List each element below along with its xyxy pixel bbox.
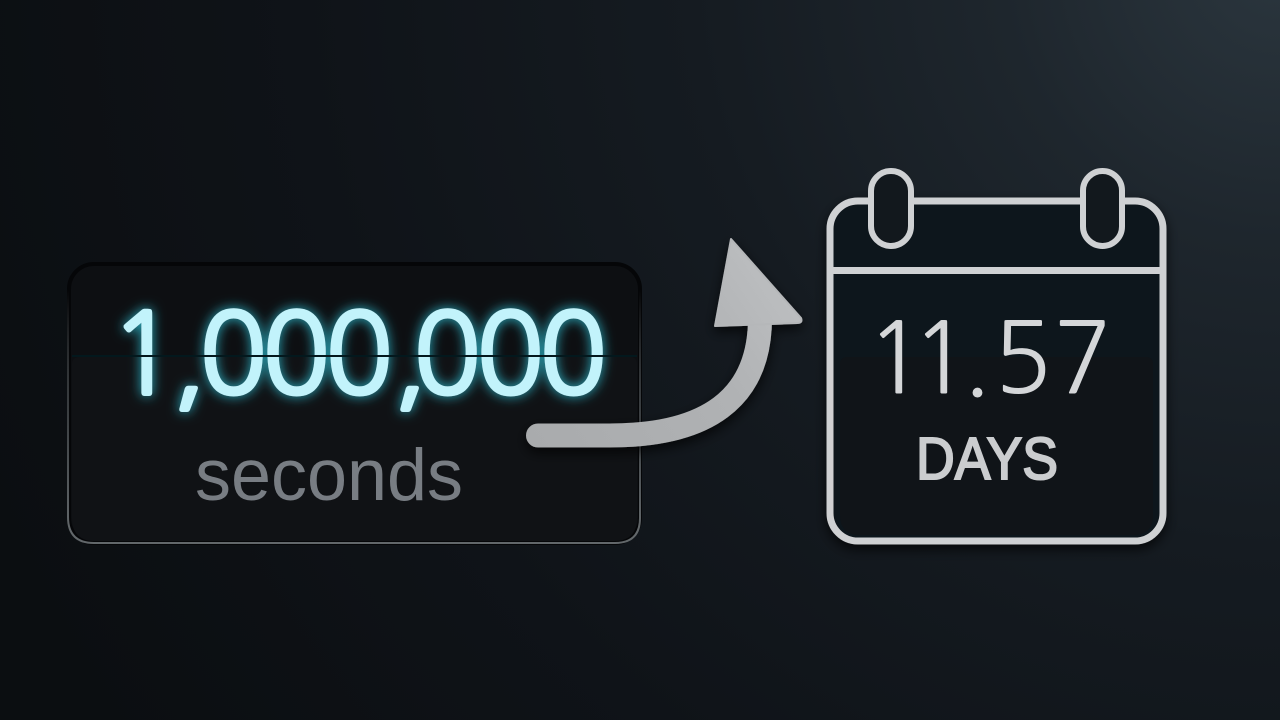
- calendar body: [830, 201, 1163, 541]
- arrow shaft: [538, 318, 760, 436]
- panel bottom rim: [68, 290, 640, 543]
- panel lower flap: [72, 357, 637, 541]
- arrow head: [715, 239, 802, 326]
- left binding ring: [871, 171, 911, 246]
- calendar header line: [832, 267, 1161, 274]
- calendar lower flap: [840, 357, 1153, 535]
- seconds value: 1,000,000: [109, 298, 607, 411]
- calendar icon: [830, 171, 1163, 541]
- flap split line: [72, 355, 637, 357]
- panel body: [69, 264, 640, 543]
- right binding ring: [1083, 171, 1122, 246]
- arrow from seconds to calendar: [538, 239, 802, 436]
- days value: 11.57: [866, 310, 1112, 408]
- days label: DAYS: [916, 426, 1058, 492]
- panel: one million seconds: [68, 264, 640, 543]
- seconds label: seconds: [195, 435, 463, 516]
